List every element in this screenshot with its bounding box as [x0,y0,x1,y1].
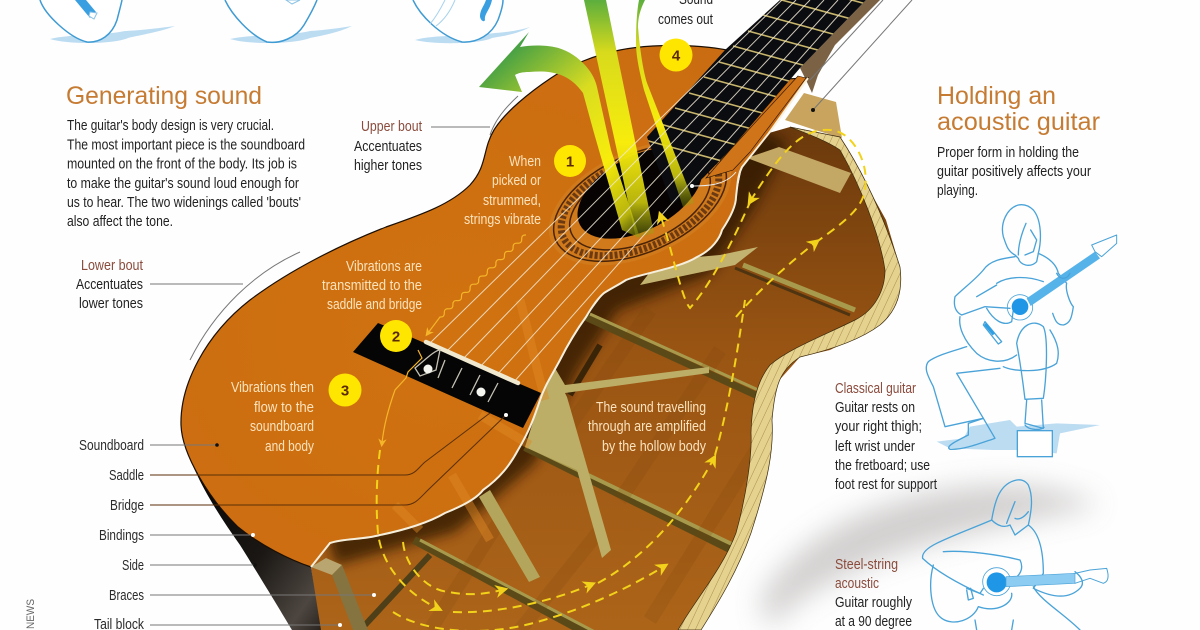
part labels: Side [122,558,144,574]
caption: vibrations flow: flow to the [254,400,314,416]
caption: strings vibrate: When [509,154,541,170]
label: lower bout: Lower bout [81,258,143,274]
stream: right [636,0,694,207]
caption: vibrations flow: soundboard [250,419,314,435]
icon: second pick hand position [225,0,352,43]
soundboard cut edge [311,78,808,567]
text block: classical guitar [835,381,937,493]
part labels [79,438,145,630]
bracing: upper wedge [640,247,758,285]
heading: generating sound: Generating sound [66,82,262,110]
label: upper bout: higher tones [354,158,422,174]
caption: vibrations transmitted [322,259,422,313]
label: upper bout [354,119,422,174]
icon: first pick hand position [40,0,175,43]
text block: proper form [937,145,1091,199]
caption: strings vibrate: picked or [492,173,541,189]
step marker 3 [328,374,362,406]
bridge [353,323,541,428]
label: lower bout [76,258,143,312]
bracing: left strut [479,490,540,582]
label: lower bout: lower tones [79,296,143,312]
stream: left curved arrow [479,32,640,238]
step marker 4 [660,38,692,72]
step marker 2: 2 [392,328,400,346]
text block: body design: mounted on the front of the body. Its job is [67,156,297,172]
heading: holding an acoustic guitar [937,82,1100,136]
step marker 3: 3 [341,382,349,400]
guitar side [181,430,321,630]
heading: holding an acoustic guitar: acoustic guitar [937,108,1100,136]
caption: strings vibrate: strings vibrate [464,212,541,228]
label: upper bout: Accentuates [354,139,422,155]
caption: sound comes out [658,0,713,28]
figure: classical guitar player [926,205,1117,457]
text block: classical guitar: your right thigh; [835,419,922,435]
text block: body design: also affect the tone. [67,214,173,230]
caption: vibrations transmitted: saddle and bridge [327,297,422,313]
guitar interior: back wood [311,127,900,630]
caption: sound amplified: by the hollow body [602,439,707,455]
panel: holding an acoustic guitar [835,82,1100,630]
bracing: upper block [747,147,851,193]
text block: classical guitar: foot rest for support [835,477,937,493]
bracing: X brace [525,363,709,558]
text block: proper form: playing. [937,183,978,199]
caption: strings vibrate: strummed, [483,193,541,209]
caption: sound amplified: The sound travelling [596,400,706,416]
caption: vibrations flow [231,380,315,455]
text block: steel-string acoustic: Guitar roughly [835,595,913,611]
part labels: Braces [109,588,144,604]
text block: classical guitar: the fretboard; use [835,458,930,474]
arrows: sound travelling inside the body [377,130,866,630]
panel: generating sound text [66,82,305,230]
sound streams [479,0,694,238]
neck side [800,0,880,93]
text block: classical guitar: Guitar rests on [835,400,915,416]
caption: strings vibrate [464,154,541,228]
guitar illustration [150,0,912,630]
caption: vibrations flow: and body [265,439,315,455]
figure: steel-string guitar player [923,480,1108,630]
leader lines to guitar parts [150,0,912,627]
label: lower bout: Accentuates [76,277,143,293]
step marker 2 [380,320,412,352]
part labels: Saddle [109,468,144,484]
strings [428,0,852,383]
caption: vibrations transmitted: Vibrations are [346,259,422,275]
tail block [311,558,368,630]
text block: body design: The most important piece is the soundboard [67,138,305,154]
text block: body design: The guitar's body design is very crucial. [67,118,274,134]
caption: sound amplified [588,400,707,455]
text block: steel-string acoustic [835,557,913,630]
text block: steel-string acoustic: at a 90 degree [835,614,912,630]
fretboard orange extension [706,76,806,178]
arrow: vibration path from strings to bridge [428,235,526,333]
soundboard underside brace ghosts [395,300,545,540]
part labels: Bindings [99,528,144,544]
step marker 1 [554,145,586,177]
heading: holding an acoustic guitar: Holding an [937,82,1056,110]
fretboard [647,0,866,204]
icon: third pick hand position [413,0,530,43]
part labels: Bridge [110,498,144,514]
guitar rim [678,127,901,630]
arrow: vibration flows to soundboard [382,350,422,443]
step marker 1: 1 [566,154,574,170]
rosette [530,115,750,291]
text block: classical guitar: left wrist under [835,439,915,455]
caption: sound comes out: comes out [658,12,713,28]
text block: body design [67,118,305,230]
text block: proper form: Proper form in holding the [937,145,1079,161]
shadow of guitar on page [760,485,1100,630]
text block: classical guitar: Classical guitar [835,381,916,397]
caption: sound amplified: through are amplified [588,419,706,435]
caption: vibrations transmitted: transmitted to the [322,278,422,294]
text block: body design: us to hear. The two widenings called 'bouts' [67,195,301,211]
sound hole [563,128,717,258]
caption: vibrations flow: Vibrations then [231,380,314,396]
interior ribs and shadows [330,133,855,630]
neck heel block [785,93,842,138]
text block: steel-string acoustic: Steel-string [835,557,898,573]
step marker 4: 4 [672,48,681,64]
part labels: Soundboard [79,438,144,454]
text block: body design: to make the guitar's sound loud enough for [67,176,299,192]
text block: steel-string acoustic: acoustic [835,576,879,592]
text block: proper form: guitar positively affects your [937,164,1091,180]
stream: centre [584,0,654,238]
label: upper bout: Upper bout [361,119,422,135]
soundboard [181,46,808,567]
credit: news: NEWS [25,599,37,629]
